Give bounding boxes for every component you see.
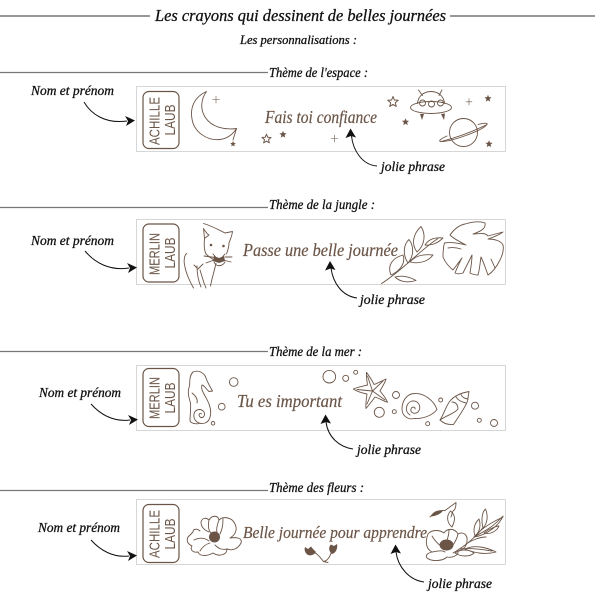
icon: conch shell — [440, 392, 469, 425]
icon: anemone bouquet — [426, 502, 503, 561]
heading: flower theme: Thème des fleurs : — [269, 481, 364, 496]
title: Les crayons qui dessinent de belles journées — [154, 6, 446, 25]
heading: space theme: Thème de l'espace : — [269, 66, 368, 81]
arrow: to name — [84, 102, 135, 126]
arrow: to phrase — [325, 261, 357, 298]
label: phrase: jolie phrase — [426, 576, 492, 591]
section: jungle theme — [30, 198, 506, 307]
icon: bubbles — [211, 370, 497, 426]
phrase: Tu es important — [237, 391, 343, 411]
label: phrase: jolie phrase — [355, 442, 421, 457]
panel: space pencil — [136, 86, 506, 152]
name tag: Achille Laub: LAUB — [162, 519, 179, 549]
icon: poppy flower — [187, 516, 241, 556]
name tag: Merlin Laub: MERLIN — [146, 377, 164, 419]
name tag: Achille Laub: ACHILLE — [146, 510, 164, 558]
icon: monstera leaf — [443, 222, 503, 275]
panel: sea pencil — [136, 366, 506, 430]
phrase: Belle journée pour apprendre — [243, 523, 427, 542]
name tag: Merlin Laub: MERLIN — [146, 233, 164, 275]
icon: flying saucer — [410, 90, 452, 120]
label: name: Nom et prénom — [30, 83, 114, 98]
arrow: to name — [91, 540, 137, 561]
section: sea theme — [38, 345, 506, 457]
name tag: Achille Laub: LAUB — [162, 105, 179, 135]
heading: sea theme: Thème de la mer : — [269, 345, 362, 360]
name tag: Achille Laub — [143, 92, 179, 148]
panel: jungle pencil — [136, 220, 506, 288]
section: flower theme — [37, 481, 506, 591]
phrase: Passe une belle journée — [242, 240, 398, 260]
label: name: Nom et prénom — [30, 233, 114, 248]
name tag: Merlin Laub: LAUB — [162, 238, 179, 268]
name tag: Merlin Laub: LAUB — [162, 383, 179, 413]
icon: seed pods — [305, 544, 337, 562]
icon: snail shell — [402, 393, 437, 419]
arrow: to phrase — [346, 128, 377, 166]
icon: ringed planet — [440, 118, 487, 146]
icon: leafy branch — [382, 226, 443, 284]
section: space theme — [30, 66, 506, 174]
name tag: Merlin Laub — [143, 368, 179, 426]
phrase: Fais toi confiance — [264, 107, 377, 127]
icon: seahorse — [188, 371, 212, 424]
icon: starfish — [353, 372, 388, 408]
label: phrase: jolie phrase — [358, 292, 425, 307]
label: name: Nom et prénom — [38, 385, 121, 400]
panel: flower pencil — [136, 500, 506, 564]
arrow: to phrase — [320, 414, 353, 449]
icon: panther — [184, 224, 232, 288]
label: phrase: jolie phrase — [379, 159, 445, 174]
arrow: to name — [85, 251, 137, 273]
icon: crescent moon — [192, 92, 236, 146]
name tag: Merlin Laub — [143, 224, 179, 282]
arrow: to phrase — [390, 544, 424, 582]
name tag: Achille Laub: ACHILLE — [146, 97, 164, 145]
name tag: Achille Laub — [143, 504, 179, 562]
subtitle: Les personnalisations : — [239, 33, 357, 47]
arrow: to name — [91, 404, 138, 425]
heading: jungle theme: Thème de la jungle : — [269, 198, 375, 213]
label: name: Nom et prénom — [37, 520, 120, 535]
icon: stars — [262, 95, 493, 147]
